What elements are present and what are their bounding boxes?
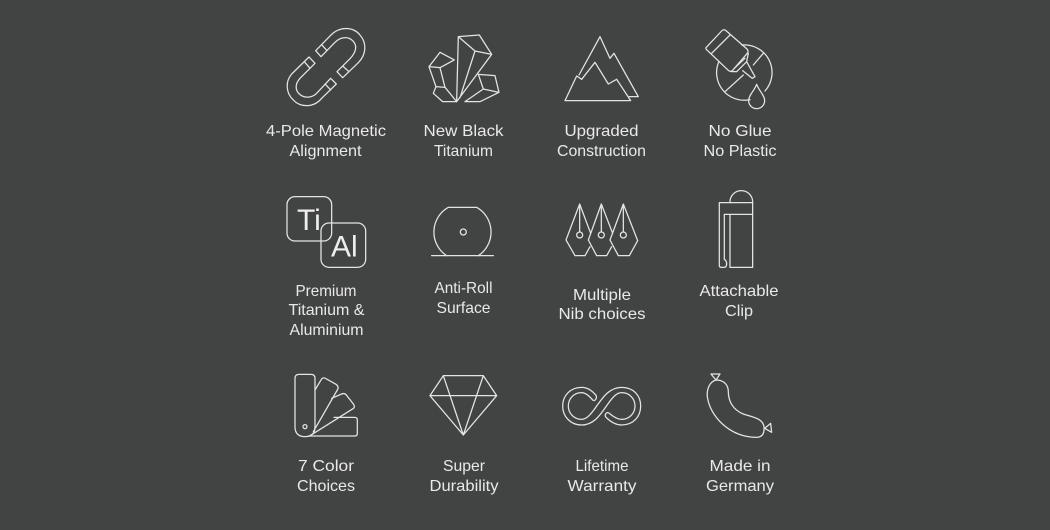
label: Upgraded bbox=[564, 123, 638, 140]
label bbox=[434, 280, 492, 317]
label: Alignment bbox=[290, 143, 362, 160]
icon: infinity ribbon bbox=[563, 387, 641, 425]
label bbox=[704, 123, 776, 160]
icon: Ti and Al element tiles: Ti bbox=[297, 204, 321, 237]
label: Warranty bbox=[568, 478, 636, 495]
label bbox=[706, 458, 774, 495]
label: Made in bbox=[710, 458, 770, 475]
feature: 4-Pole Magnetic Alignment bbox=[266, 29, 386, 160]
feature: New Black Titanium bbox=[424, 35, 505, 160]
icon: diamond bbox=[430, 376, 497, 435]
label bbox=[568, 458, 636, 495]
label: 4-Pole Magnetic bbox=[266, 123, 386, 140]
label bbox=[297, 458, 355, 495]
feature: Premium Titanium & Aluminium bbox=[287, 197, 366, 339]
icon: glue bottle crossed out bbox=[706, 30, 772, 109]
label: Premium bbox=[296, 283, 356, 300]
icon: sausage bbox=[707, 374, 772, 437]
icon: crystals bbox=[429, 35, 499, 102]
label: Super bbox=[443, 458, 486, 475]
label: Germany bbox=[706, 478, 774, 495]
label bbox=[288, 283, 365, 339]
label: Choices bbox=[297, 478, 355, 495]
label: Titanium & bbox=[288, 302, 365, 319]
label: Titanium bbox=[434, 143, 493, 160]
icon: three pen nibs bbox=[566, 204, 638, 256]
feature: Lifetime Warranty bbox=[563, 387, 641, 495]
feature: Made in Germany bbox=[706, 374, 774, 495]
label: New Black bbox=[424, 123, 505, 140]
feature: Super Durability bbox=[430, 376, 498, 495]
icon: Ti and Al element tiles bbox=[287, 197, 366, 267]
label: No Plastic bbox=[704, 143, 776, 160]
icon: magnets bbox=[287, 29, 365, 106]
label: Construction bbox=[557, 143, 646, 160]
label: Surface bbox=[436, 300, 491, 317]
feature: Upgraded Construction bbox=[557, 37, 646, 160]
label bbox=[266, 123, 386, 160]
feature: 7 Color Choices bbox=[295, 374, 357, 495]
icon: Ti and Al element tiles: Al bbox=[331, 230, 358, 263]
feature: No Glue No Plastic bbox=[704, 30, 776, 160]
label: Durability bbox=[430, 478, 498, 495]
label: Attachable bbox=[700, 283, 779, 300]
feature: Anti-Roll Surface bbox=[432, 207, 493, 317]
icon: flat-sided barrel on surface bbox=[432, 207, 493, 256]
label: Nib choices bbox=[558, 306, 646, 323]
icon: mountains bbox=[565, 37, 638, 101]
label bbox=[430, 458, 498, 495]
label bbox=[424, 123, 505, 160]
label: Anti-Roll bbox=[434, 280, 492, 297]
icon: colour swatch fan bbox=[295, 374, 357, 437]
label: Lifetime bbox=[576, 458, 629, 475]
label: No Glue bbox=[708, 123, 772, 140]
feature: Multiple Nib choices bbox=[558, 204, 646, 323]
feature: Attachable Clip bbox=[700, 191, 779, 320]
icon: pen clip bbox=[719, 191, 753, 267]
label bbox=[700, 283, 779, 320]
label bbox=[557, 123, 646, 160]
label bbox=[558, 287, 646, 323]
label: Multiple bbox=[573, 287, 631, 304]
label: Aluminium bbox=[290, 322, 364, 339]
label: 7 Color bbox=[298, 458, 355, 475]
label: Clip bbox=[725, 303, 753, 320]
